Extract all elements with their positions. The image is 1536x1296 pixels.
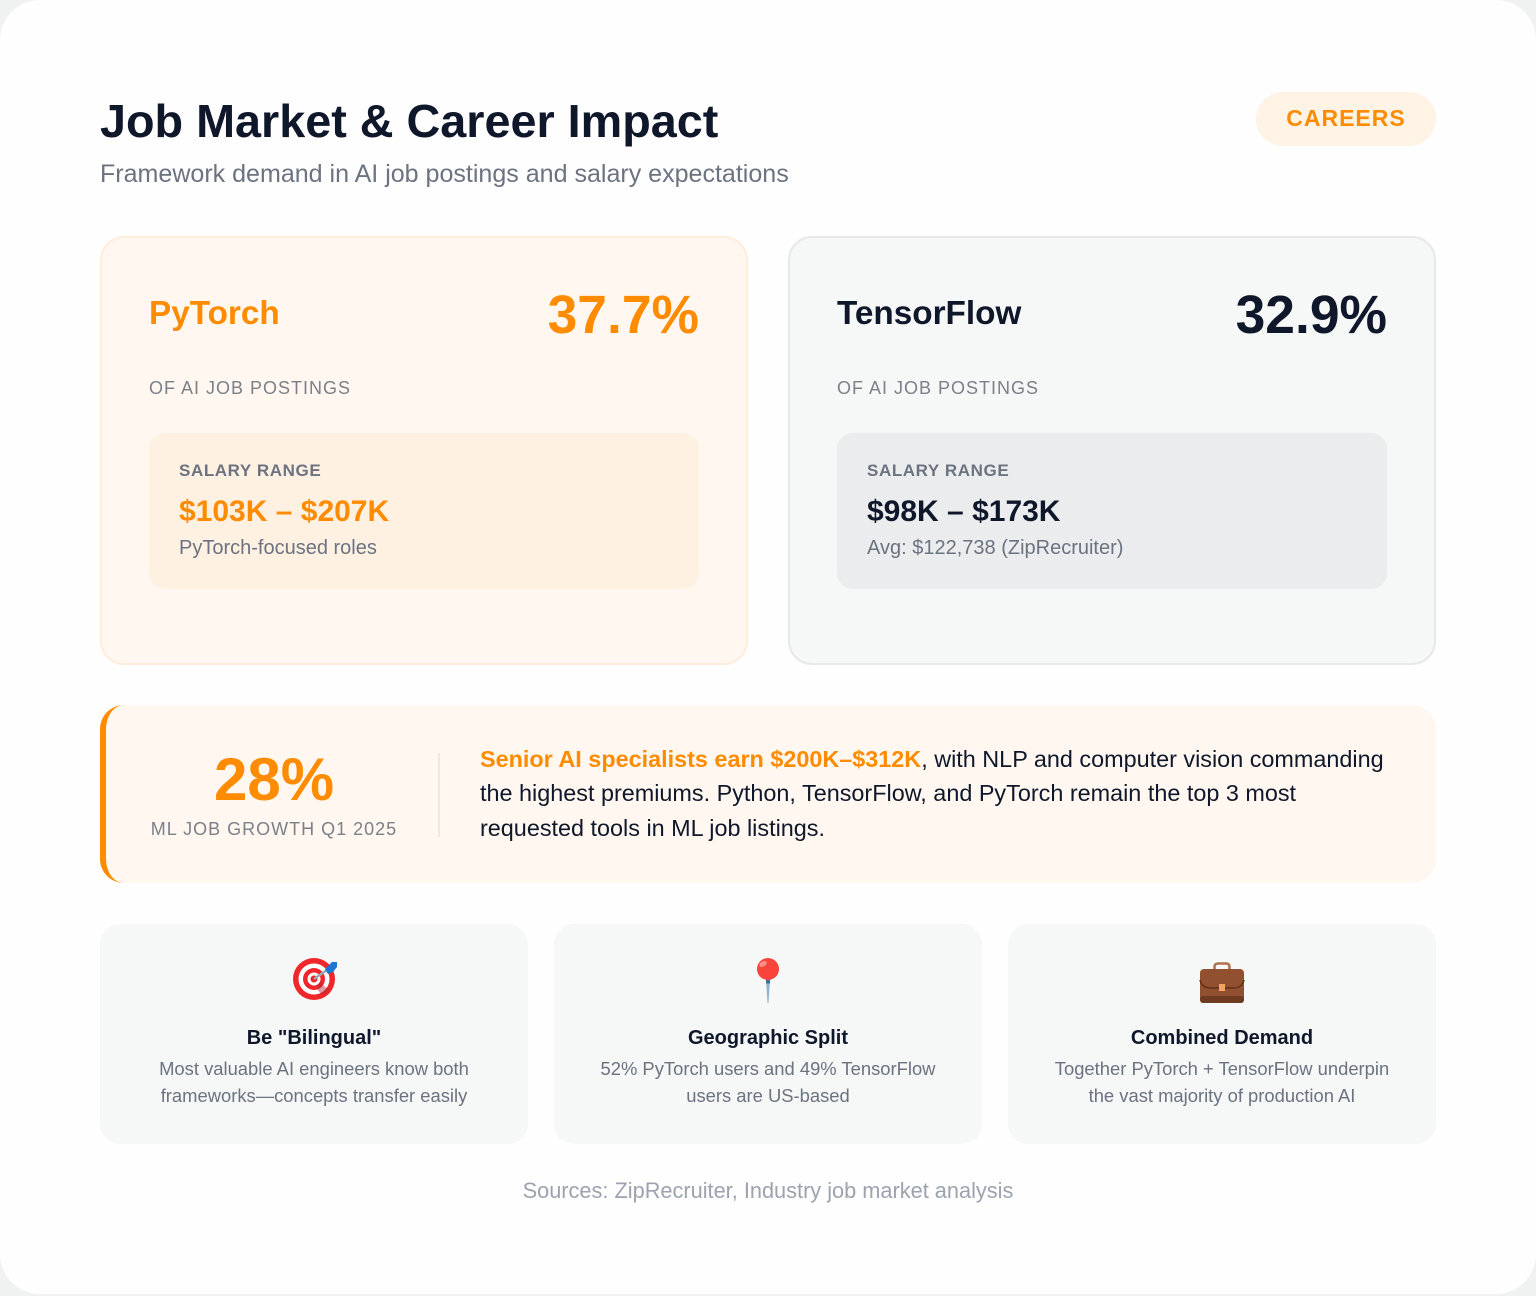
PyTorch salary box: [149, 433, 699, 589]
tip text: frameworks—concepts transfer easily: [161, 1085, 467, 1106]
tip text: Most valuable AI engineers know both: [159, 1058, 469, 1079]
panel: TensorFlow: [788, 236, 1436, 665]
PyTorch share: 37.7%: [548, 286, 699, 345]
PyTorch salary value: $103K – $207K: [179, 495, 389, 528]
panel: Combined Demand: [1008, 924, 1436, 1144]
TensorFlow share caption: OF AI JOB POSTINGS: [837, 378, 1039, 398]
badge: careers: [1256, 92, 1436, 146]
tip text: [159, 1058, 469, 1106]
TensorFlow share: 32.9%: [1236, 286, 1387, 345]
panel: Be Bilingual: [100, 924, 528, 1144]
callout text: [480, 746, 1384, 841]
callout text: Senior AI specialists earn $200K–$312K, with NLP and computer vision commanding: [480, 746, 1384, 772]
tip heading: Geographic Split: [688, 1027, 848, 1049]
tip text: [601, 1058, 936, 1106]
badge: careers: CAREERS: [1286, 105, 1406, 131]
TensorFlow salary value: $98K – $173K: [867, 495, 1060, 528]
TensorFlow salary label: SALARY RANGE: [867, 461, 1009, 480]
tip heading: Be "Bilingual": [247, 1027, 381, 1049]
tip text: 52% PyTorch users and 49% TensorFlow: [601, 1058, 935, 1079]
callout text: requested tools in ML job listings.: [480, 815, 825, 841]
tip text: [1055, 1058, 1389, 1106]
title: Job Market & Career Impact: [100, 95, 718, 147]
tip text: the vast majority of production AI: [1089, 1085, 1355, 1106]
tip text: Together PyTorch + TensorFlow underpin: [1055, 1058, 1389, 1079]
growth stat: 28%: [214, 746, 334, 813]
tip text: users are US-based: [686, 1085, 850, 1106]
panel: Geographic Split: [554, 924, 982, 1144]
PyTorch salary label: SALARY RANGE: [179, 461, 321, 480]
growth caption: ML JOB GROWTH Q1 2025: [151, 819, 397, 839]
sources footer: Sources: ZipRecruiter, Industry job market analysis: [523, 1178, 1013, 1203]
tip heading: Combined Demand: [1131, 1027, 1313, 1049]
subtitle: Framework demand in AI job postings and salary expectations: [100, 160, 789, 188]
divider: [438, 753, 440, 837]
panel: PyTorch: [100, 236, 748, 665]
icon: target: [293, 958, 337, 1000]
TensorFlow salary box: [837, 433, 1387, 589]
icon: pin: [757, 958, 779, 1003]
icon: briefcase: [1199, 962, 1245, 1003]
PyTorch share caption: OF AI JOB POSTINGS: [149, 378, 351, 398]
TensorFlow name: TensorFlow: [837, 295, 1021, 332]
PyTorch name: PyTorch: [149, 295, 280, 332]
panel: growth callout: [100, 705, 1436, 883]
callout text: the highest premiums. Python, TensorFlow, and PyTorch remain the top 3 most: [480, 780, 1296, 806]
PyTorch salary note: PyTorch-focused roles: [179, 537, 377, 559]
TensorFlow salary note: Avg: $122,738 (ZipRecruiter): [867, 537, 1123, 559]
